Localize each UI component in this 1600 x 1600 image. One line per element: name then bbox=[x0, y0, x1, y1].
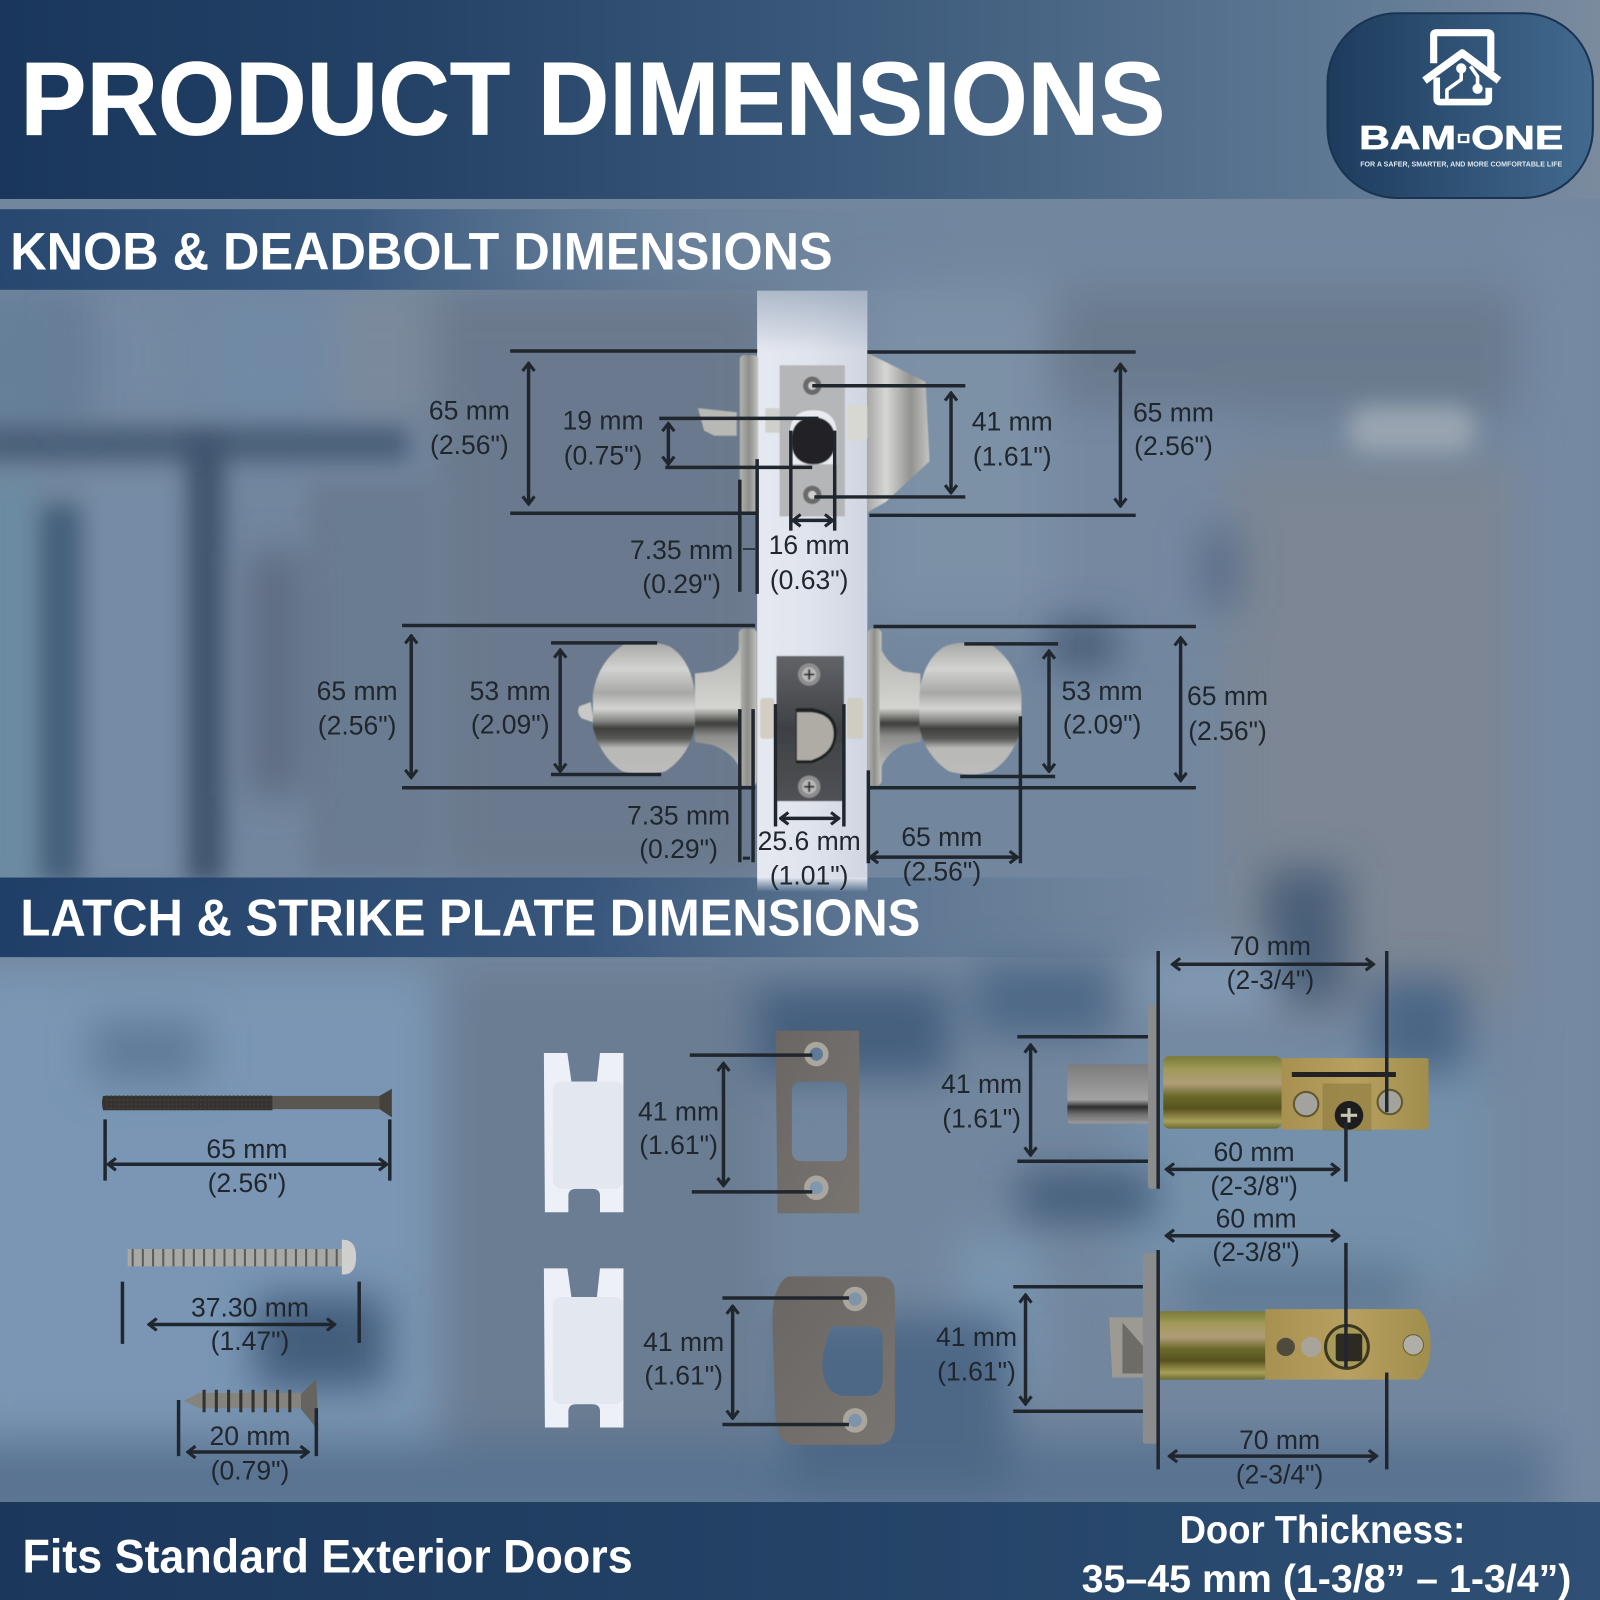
dimension: deadbolt 16 mm: 16 mm bbox=[769, 530, 850, 560]
dimension: deadbolt 7.35 mm bbox=[630, 459, 757, 599]
dimension: knob left 65 mm: (2.56") bbox=[318, 711, 396, 741]
icon: smart home bbox=[1424, 33, 1499, 102]
strike plate: square: 41 mm bbox=[638, 1096, 719, 1126]
dimension: deadbolt 19 mm bbox=[563, 406, 818, 470]
section bar: knob and deadbolt bbox=[0, 209, 1020, 290]
spring latch: (2-3/4") bbox=[1236, 1460, 1323, 1490]
deadbolt latch bbox=[941, 931, 1429, 1201]
spring latch: 60 mm bbox=[1216, 1204, 1297, 1234]
spring latch: 70 mm bbox=[1239, 1425, 1320, 1455]
dimension: deadbolt right 65 mm: 65 mm bbox=[1133, 397, 1214, 427]
logo badge bbox=[1328, 13, 1593, 198]
tagline: FOR A SAFER, SMARTER, AND MORE COMFORTABLE LIFE bbox=[1360, 160, 1562, 168]
shim: upper white plate bbox=[544, 1053, 623, 1212]
dimension: knob projection 65 mm: (2.56") bbox=[902, 857, 981, 887]
dimension: deadbolt 16 mm: (0.63") bbox=[770, 565, 849, 595]
dimension: deadbolt left 65 mm: 65 mm bbox=[429, 395, 510, 425]
dimension: knob right 53 mm: (2.09") bbox=[1063, 710, 1141, 740]
dimension: deadbolt 19 mm: 19 mm bbox=[563, 406, 644, 436]
dimension: knob right 65 mm: (2.56") bbox=[1188, 716, 1267, 746]
footer: door fit: Fits Standard Exterior Doors bbox=[22, 1530, 633, 1582]
deadbolt latch: 60 mm bbox=[1214, 1137, 1295, 1167]
dimension: latch plate 25.6 mm: (1.01") bbox=[770, 861, 849, 891]
dimension: knob right 53 mm bbox=[960, 644, 1143, 777]
dimension: knob left 53 mm: (2.09") bbox=[471, 710, 550, 740]
section bar: latch and strike plate bbox=[0, 878, 1173, 957]
latch plate bbox=[777, 656, 844, 801]
dimension: deadbolt 19 mm: (0.75") bbox=[564, 440, 642, 470]
dimension: knob right 53 mm: 53 mm bbox=[1062, 676, 1143, 706]
dimension: knob right 65 mm: 65 mm bbox=[1187, 681, 1268, 711]
strike plate: curved lip: (1.61") bbox=[644, 1361, 723, 1391]
spring latch: (1.61") bbox=[937, 1357, 1016, 1387]
spring latch: (2-3/8") bbox=[1212, 1237, 1300, 1267]
dimension: knob left 53 mm: 53 mm bbox=[470, 676, 551, 706]
dimension: knob left 65 mm: 65 mm bbox=[317, 676, 398, 706]
strike plate: curved lip bbox=[643, 1277, 895, 1445]
strike plate: curved lip: 41 mm bbox=[643, 1327, 724, 1357]
screw: 65 mm bbox=[102, 1089, 392, 1198]
dimension: deadbolt 41 mm: 41 mm bbox=[972, 407, 1053, 437]
dimension: deadbolt right 65 mm bbox=[867, 352, 1214, 515]
screw: 65 mm: 65 mm bbox=[206, 1134, 287, 1164]
header band bbox=[0, 0, 1600, 199]
spring latch bbox=[936, 1204, 1431, 1490]
dimension: deadbolt 16 mm bbox=[769, 431, 850, 595]
dimension: knob left 53 mm bbox=[470, 643, 661, 774]
screw: 37.30 mm bbox=[122, 1240, 359, 1356]
deadbolt latch: (2-3/4") bbox=[1227, 965, 1314, 995]
strike plate: square: (1.61") bbox=[639, 1130, 718, 1160]
footer: thickness range: 35–45 mm (1-3/8” – 1-3/4”) bbox=[1082, 1558, 1571, 1600]
dimension: knob right 65 mm bbox=[869, 627, 1268, 788]
deadbolt latch: (1.61") bbox=[942, 1104, 1021, 1134]
spring latch: 41 mm bbox=[936, 1322, 1017, 1352]
dimension: deadbolt 7.35 mm: (0.29") bbox=[642, 569, 721, 599]
dimensions: knob bbox=[317, 626, 1268, 891]
deadbolt latch: 70 mm bbox=[1230, 931, 1311, 961]
cylinder bbox=[867, 353, 930, 512]
dimension: deadbolt 41 mm bbox=[812, 386, 1053, 497]
dimension: deadbolt left 65 mm bbox=[429, 351, 757, 513]
title: PRODUCT DIMENSIONS bbox=[20, 42, 1165, 158]
heading: knob and deadbolt: KNOB & DEADBOLT DIMENSIONS bbox=[10, 222, 833, 281]
right knob bbox=[867, 629, 882, 786]
dimension: deadbolt 7.35 mm: 7.35 mm bbox=[630, 535, 733, 565]
deadbolt latch: 41 mm bbox=[941, 1069, 1022, 1099]
screw: 37.30 mm: 37.30 mm bbox=[191, 1292, 309, 1322]
shim: lower white plate bbox=[544, 1268, 623, 1428]
dimension: knob projection 65 mm: 65 mm bbox=[901, 822, 982, 852]
screw: 20 mm: (0.79") bbox=[211, 1456, 289, 1486]
dimension: deadbolt left 65 mm: (2.56") bbox=[430, 430, 509, 460]
strike plate: square bbox=[638, 1031, 859, 1213]
thumb turn bbox=[698, 408, 737, 436]
dimension: knob 7.35 mm bbox=[627, 709, 753, 864]
dimension: deadbolt 41 mm: (1.61") bbox=[973, 441, 1052, 471]
dimension: latch plate 25.6 mm: 25.6 mm bbox=[758, 826, 861, 856]
dimension: knob 7.35 mm: (0.29") bbox=[639, 834, 718, 864]
dimensions: deadbolt bbox=[429, 351, 1214, 599]
footer band bbox=[0, 1502, 1600, 1600]
dimension: knob left 65 mm bbox=[317, 626, 755, 788]
deadbolt illustration bbox=[698, 353, 930, 516]
screw: 37.30 mm: (1.47") bbox=[211, 1326, 289, 1356]
screw: 65 mm: (2.56") bbox=[208, 1168, 286, 1198]
footer: door thickness: Door Thickness: bbox=[1180, 1509, 1465, 1552]
dimension: latch plate 25.6 mm bbox=[758, 704, 861, 891]
dimension: deadbolt right 65 mm: (2.56") bbox=[1134, 431, 1213, 461]
heading: latch and strike plate: LATCH & STRIKE PLATE DIMENSIONS bbox=[20, 890, 920, 948]
screw: 20 mm: 20 mm bbox=[209, 1421, 291, 1451]
screw: 20 mm bbox=[179, 1379, 318, 1486]
dimension: knob 7.35 mm: 7.35 mm bbox=[627, 800, 730, 830]
left knob bbox=[578, 702, 594, 722]
brand name: BAM▫ONE bbox=[1359, 120, 1563, 157]
door edge bbox=[757, 291, 867, 892]
deadbolt latch: (2-3/8") bbox=[1210, 1171, 1298, 1201]
dimension: knob projection 65 mm bbox=[868, 716, 1020, 887]
knob illustration bbox=[578, 629, 1021, 801]
